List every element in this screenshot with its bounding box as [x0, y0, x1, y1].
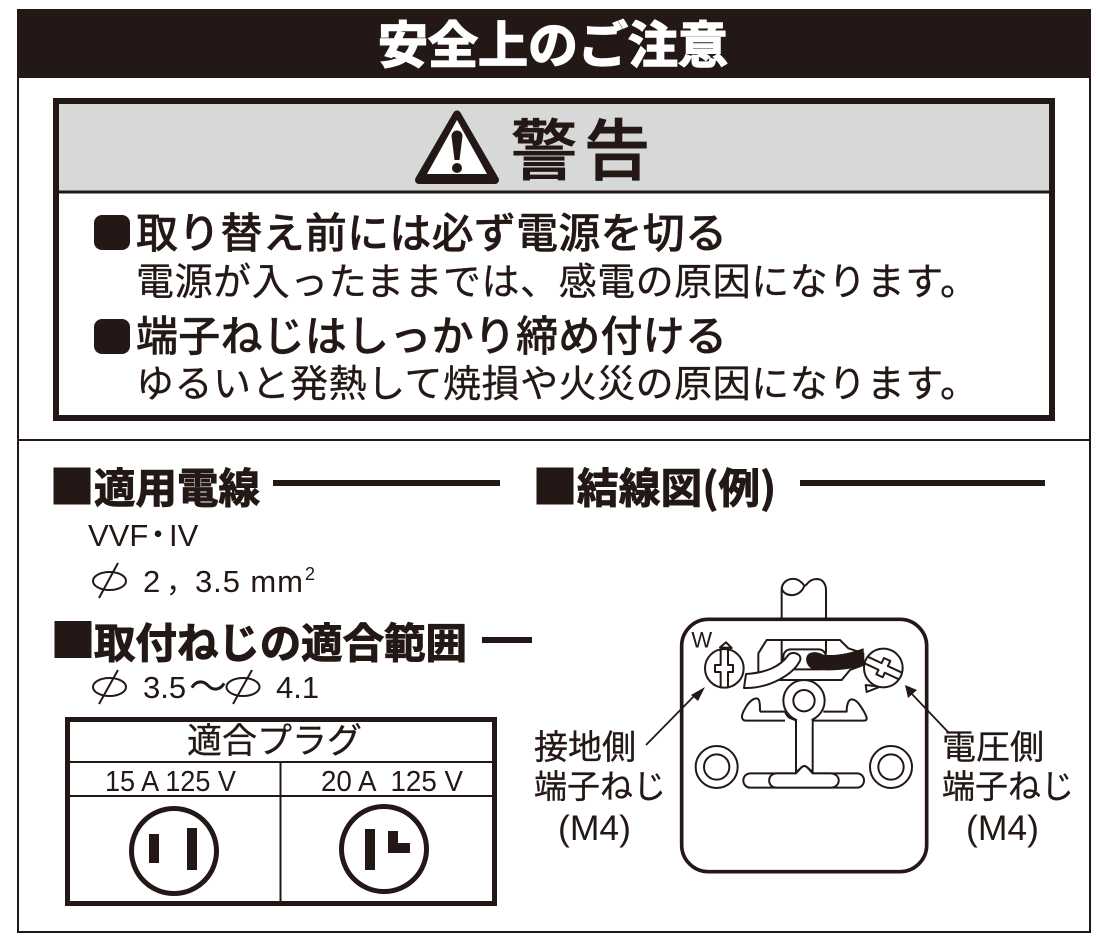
icon: warning triangle	[419, 114, 495, 180]
screw diameter range: 3.5	[143, 670, 186, 705]
slot arms and stem	[742, 698, 867, 772]
heading: mounting screw range: ■	[50, 604, 96, 670]
title: 安全上のご注意	[378, 6, 728, 78]
screw diameter range	[93, 656, 319, 711]
wire diameter	[93, 559, 315, 601]
icon: 20A plug	[342, 806, 426, 892]
warning item 1 text: 電源が入ったままでは、感電の原因になります。	[136, 251, 978, 306]
arrow: voltage screw	[905, 685, 949, 733]
warning item 1 heading: 取り替え前には必ず電源を切る	[136, 200, 727, 261]
panel: warning	[56, 98, 1052, 418]
warning item 2 heading: 端子ねじはしっかり締め付ける	[136, 303, 727, 364]
receptacle body	[682, 619, 927, 872]
label: ground side terminal: 接地側	[534, 720, 636, 769]
wire type: ・	[142, 510, 174, 555]
label: 15 A 125 V: 15 A 125 V	[105, 766, 237, 798]
warning heading: 警告	[511, 98, 650, 194]
heading: wiring diagram: 結線図(例)	[577, 455, 776, 515]
heading: mounting screw range: 取付ねじの適合範囲	[94, 610, 467, 670]
ground post	[783, 680, 825, 721]
arrow: ground screw	[646, 687, 705, 745]
voltage screw	[863, 649, 904, 692]
label: ground side terminal	[534, 720, 666, 848]
lower bar	[743, 773, 864, 788]
label: ground side terminal: 端子ねじ	[534, 760, 666, 808]
table: compatible plugs	[67, 713, 495, 904]
heading: applicable wire: 適用電線	[94, 455, 260, 515]
right mounting hole	[870, 746, 912, 788]
wiring diagram	[682, 579, 927, 872]
ground screw	[705, 642, 744, 688]
warning header band	[59, 104, 1049, 192]
wire diameter: 2	[305, 564, 315, 584]
warning item 2 text: ゆるいと発熱して焼損や火災の原因になります。	[136, 353, 978, 408]
icon: 15A plug	[132, 808, 216, 894]
white wire	[744, 653, 800, 688]
wire diameter: ，	[166, 559, 195, 601]
screw diameter range: 4.1	[276, 670, 319, 705]
title bar	[17, 6, 1091, 78]
wire type: IV	[169, 518, 199, 553]
W mark: W	[691, 628, 712, 653]
heading: applicable wire: ■	[50, 451, 95, 516]
label: 20 A 125 V: 20 A 125 V	[321, 766, 464, 798]
label: voltage side terminal: (M4)	[966, 808, 1039, 848]
heading: wiring diagram	[532, 451, 1045, 516]
heading: wiring diagram: ■	[532, 451, 578, 516]
left mounting hole	[696, 746, 738, 788]
label: voltage side terminal: 端子ねじ	[942, 760, 1074, 808]
wire diameter: 2	[143, 564, 160, 599]
label: voltage side terminal	[942, 720, 1074, 848]
wire diameter: 3.5 mm	[195, 564, 303, 599]
table heading: 適合プラグ	[187, 713, 362, 764]
label: voltage side terminal: 電圧側	[942, 720, 1044, 769]
wire type	[88, 510, 199, 555]
black wire	[806, 649, 863, 670]
heading: applicable wire	[50, 451, 500, 516]
terminal plate	[758, 640, 863, 680]
wire type: VVF	[88, 518, 148, 553]
cord	[782, 579, 826, 620]
label: ground side terminal: (M4)	[558, 808, 631, 848]
screw diameter range: ～	[189, 656, 227, 711]
